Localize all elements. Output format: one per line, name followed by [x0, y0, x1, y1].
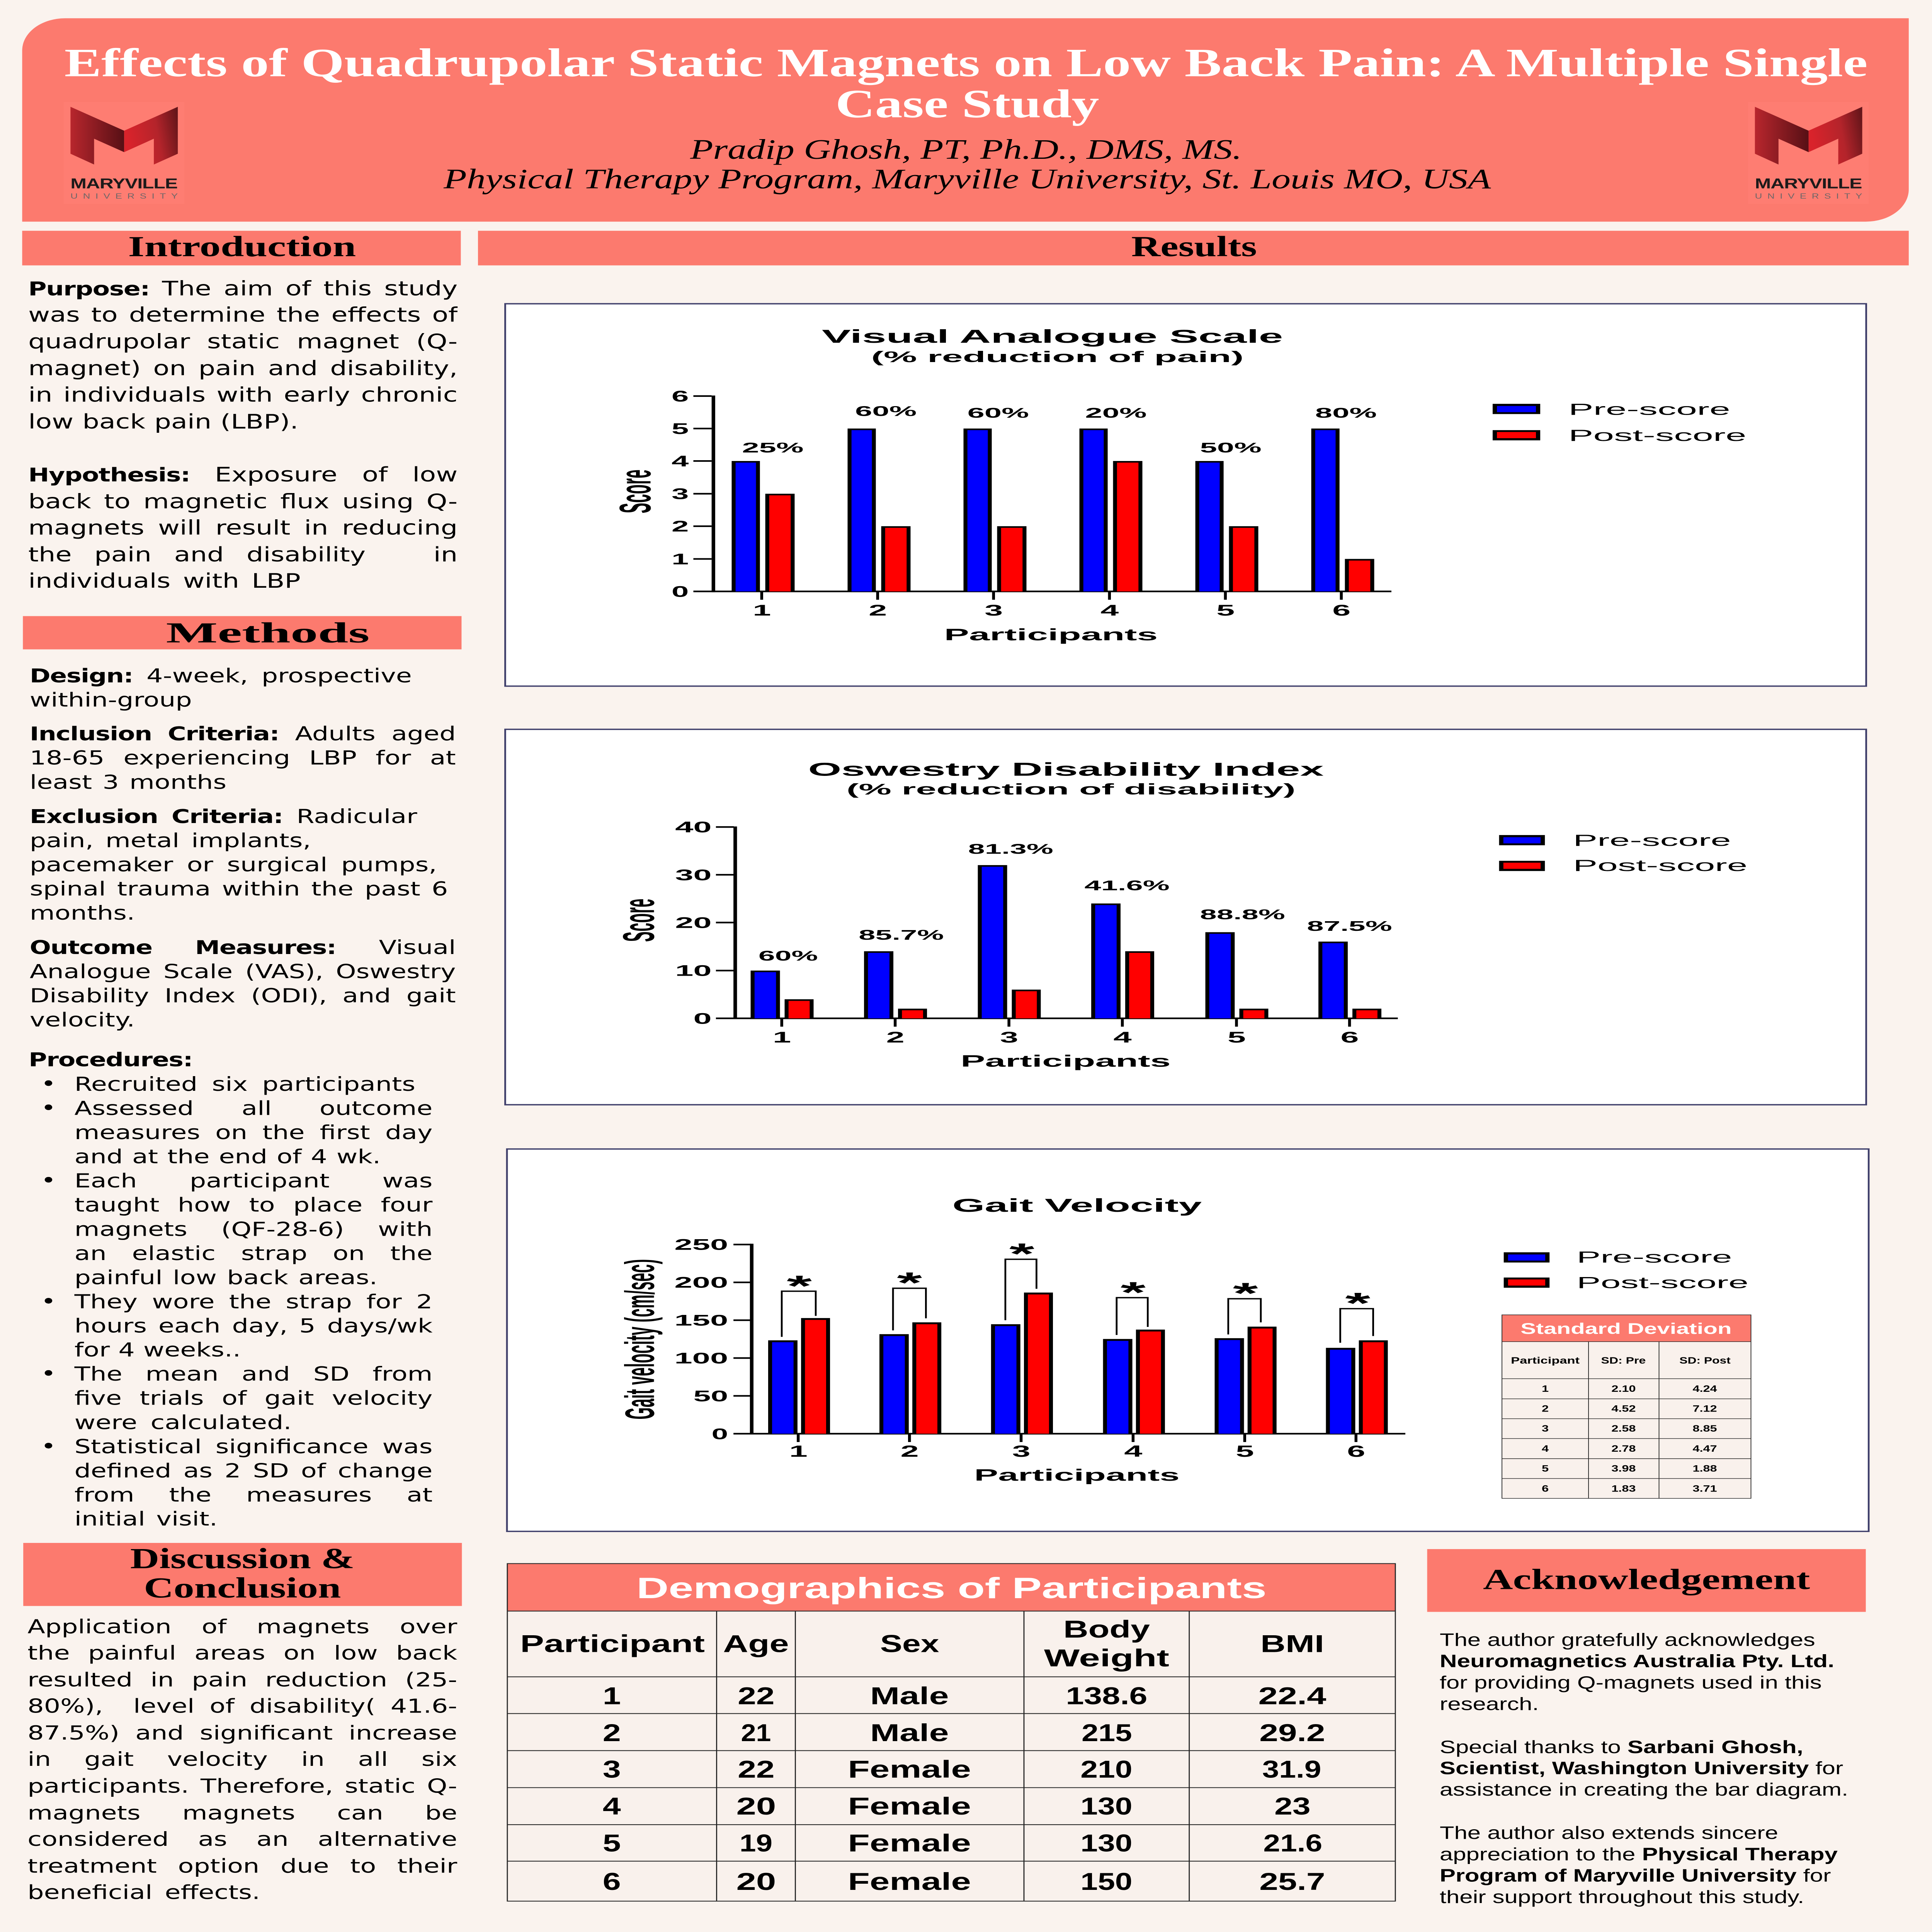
bars: pre-score: [732, 429, 1340, 592]
text: introduction purpose and hypothesis: the pain and disability in: [28, 543, 457, 566]
text: discussion and conclusion: 80%), level of disability( 41.6-: [27, 1695, 457, 1717]
text: methods criteria: spinal trauma within the past 6: [30, 878, 448, 900]
x axis numbers: 6: [1332, 602, 1350, 619]
text: discussion and conclusion: participants. Therefore, static Q-: [27, 1775, 457, 1797]
y axis numbers: 20: [675, 914, 712, 932]
table: Standard Deviation: Participant: [1511, 1355, 1580, 1366]
text: procedures list: The mean and SD from: [75, 1362, 432, 1385]
percent reduction labels: 20%: [1085, 405, 1147, 421]
text: procedures list: initial visit.: [75, 1507, 218, 1530]
text: discussion and conclusion: [27, 1610, 457, 1908]
text: acknowledgement: for providing Q-magnets used in this: [1440, 1673, 1822, 1692]
demographics rows: 25.7: [1259, 1868, 1325, 1895]
text: introduction purpose and hypothesis: magnets will result in reducing: [28, 516, 457, 539]
y axis numbers: 6: [672, 388, 689, 405]
percent reduction labels: 25%: [742, 440, 804, 456]
demographics rows: 22: [738, 1756, 775, 1783]
text: procedures list: painful low back areas.: [75, 1266, 378, 1289]
panel: Gait Velocity chart: [507, 1149, 1869, 1531]
legend: [1504, 1248, 1748, 1292]
panel: Visual Analogue Scale chart: [505, 304, 1866, 686]
bars: post-score: [765, 461, 1374, 592]
authors and affiliation: [443, 134, 1491, 195]
table: Standard Deviation: 3: [1542, 1423, 1549, 1434]
x axis numbers: [789, 1443, 1365, 1460]
demographics rows: Male: [870, 1719, 949, 1747]
panel: Oswestry Disability Index chart: [505, 730, 1866, 1105]
table: Standard Deviation: 7.12: [1693, 1403, 1717, 1414]
x axis numbers: 2: [869, 602, 887, 619]
table: Standard Deviation: 1.83: [1611, 1483, 1636, 1494]
legend: Pre-score: [1568, 401, 1730, 418]
percent reduction labels: [759, 841, 1392, 964]
legend: Post-score: [1573, 857, 1747, 875]
text: introduction purpose and hypothesis: in individuals with early chronic: [28, 383, 457, 406]
x axis numbers: [753, 602, 1350, 619]
x axis numbers: 3: [1000, 1029, 1018, 1046]
text: methods criteria: Disability Index (ODI), and gait: [30, 984, 456, 1007]
demographics rows: 20: [736, 1793, 776, 1820]
text: procedures list: hours each day, 5 days/wk: [75, 1315, 432, 1337]
text: acknowledgement: Program of Maryville University for: [1440, 1866, 1831, 1886]
percent reduction labels: 85.7%: [859, 927, 944, 943]
text: methods criteria: 18-65 experiencing LBP for at: [30, 747, 456, 769]
logo: Maryville University left: [64, 102, 184, 204]
table: Standard Deviation: 2: [1542, 1403, 1549, 1414]
heading: Discussion and Conclusion: Discussion &: [130, 1543, 355, 1575]
logo: Maryville University right: [1748, 102, 1869, 204]
demographics rows: 21.6: [1263, 1830, 1322, 1857]
text: discussion and conclusion: resulted in pain reduction (25-: [27, 1668, 457, 1691]
x axis numbers: 5: [1216, 602, 1235, 619]
significance asterisks: *: [897, 1267, 922, 1299]
text: introduction purpose and hypothesis: Purpose: The aim of this study: [28, 277, 457, 300]
chart title: Gait Velocity: [952, 1195, 1202, 1216]
heading: Discussion and Conclusion: [23, 1543, 462, 1606]
x axis numbers: 4: [1113, 1029, 1132, 1046]
table: Standard Deviation: 2.78: [1611, 1444, 1636, 1454]
chart axes: [693, 395, 1391, 600]
authors and affiliation: Physical Therapy Program, Maryville University, St. Louis MO, USA: [443, 163, 1491, 195]
x axis numbers: 2: [901, 1443, 919, 1460]
x axis label: Participants: [961, 1051, 1171, 1070]
x axis label: Participants: [944, 625, 1158, 644]
text: procedures list: defined as 2 SD of change: [75, 1459, 432, 1482]
legend: Pre-score: [1577, 1248, 1732, 1266]
table: Standard Deviation: SD: Pre: [1601, 1355, 1646, 1366]
text: discussion and conclusion: treatment option due to their: [27, 1855, 457, 1877]
percent reduction labels: 81.3%: [968, 841, 1053, 857]
text: acknowledgement: their support throughout this study.: [1440, 1887, 1804, 1907]
table: Demographics of Participants: [507, 1564, 1395, 1901]
bars: pre-score: [768, 1324, 1355, 1434]
bars: post-score: [785, 951, 1381, 1018]
demographics rows: 4: [603, 1793, 621, 1820]
text: procedures list: were calculated.: [75, 1411, 292, 1434]
demographics column headers: Body: [1063, 1616, 1150, 1643]
x axis numbers: 4: [1124, 1443, 1143, 1460]
demographics rows: 23: [1274, 1793, 1311, 1820]
percent reduction labels: [742, 403, 1377, 456]
demographics rows: 19: [740, 1830, 772, 1857]
significance asterisks: *: [787, 1270, 812, 1303]
text: procedures list: an elastic strap on the: [75, 1242, 432, 1265]
demographics rows: 2: [603, 1719, 621, 1747]
y axis label: Gait velocity (cm/sec): [617, 1259, 663, 1420]
demographics rows: 215: [1082, 1719, 1132, 1747]
percent reduction labels: 50%: [1200, 440, 1262, 456]
chart title: (% reduction of pain): [871, 348, 1244, 366]
x axis numbers: 1: [789, 1443, 808, 1460]
text: procedures list: magnets (QF-28-6) with: [75, 1218, 432, 1240]
demographics rows: 3: [603, 1756, 621, 1783]
text: discussion and conclusion: the painful areas on low back: [27, 1642, 457, 1664]
text: procedures list: taught how to place four: [75, 1194, 432, 1216]
chart axes: [733, 1244, 1405, 1442]
demographics rows: 138.6: [1066, 1682, 1147, 1709]
text: methods criteria: pacemaker or surgical pumps,: [30, 853, 437, 876]
title: Effects of Quadrupolar Static Magnets on Low Back Pain: A Multiple Single: [65, 41, 1867, 85]
y axis numbers: 40: [675, 819, 712, 836]
significance asterisks: *: [1345, 1287, 1370, 1320]
title: Case Study: [835, 82, 1099, 126]
significance asterisks: [787, 1238, 1370, 1320]
x axis label: Participants: [974, 1466, 1180, 1484]
table: Standard Deviation: 3.98: [1611, 1463, 1636, 1474]
significance asterisks: *: [1009, 1238, 1034, 1270]
chart axes: [716, 826, 1398, 1027]
demographics rows: 29.2: [1259, 1719, 1325, 1747]
text: acknowledgement: research.: [1440, 1694, 1539, 1714]
text: acknowledgement: Special thanks to Sarbani Ghosh,: [1440, 1737, 1803, 1757]
bars: post-score: [801, 1293, 1388, 1434]
legend: [1493, 401, 1746, 444]
y axis numbers: 1: [672, 551, 689, 568]
x axis numbers: 1: [773, 1029, 791, 1046]
demographics rows: 6: [603, 1868, 621, 1895]
bars: pre-score: [751, 865, 1348, 1018]
demographics rows: [603, 1682, 1327, 1895]
heading: Discussion and Conclusion: Conclusion: [144, 1572, 341, 1604]
y axis numbers: [675, 819, 712, 1027]
table: Standard Deviation: 1.88: [1693, 1463, 1717, 1474]
text: introduction purpose and hypothesis: back to magnetic flux using Q-: [28, 490, 457, 513]
text: methods criteria: pain, metal implants,: [30, 829, 311, 852]
text: methods criteria: Analogue Scale (VAS), Oswestry: [30, 960, 456, 983]
demographics column headers: Sex: [880, 1630, 939, 1657]
text: procedures list: Statistical significance was: [75, 1435, 432, 1458]
chart title: [808, 759, 1324, 798]
text: methods criteria: Outcome Measures: Visual: [30, 936, 456, 959]
table: Standard Deviation: 8.85: [1693, 1423, 1717, 1434]
demographics rows: Female: [848, 1756, 971, 1783]
demographics column headers: Participant: [520, 1630, 705, 1657]
demographics rows: Male: [870, 1682, 949, 1709]
heading: Acknowledgement: [1427, 1549, 1866, 1612]
y axis numbers: 200: [674, 1274, 728, 1291]
y axis numbers: 10: [675, 962, 712, 980]
y axis numbers: 100: [674, 1350, 728, 1367]
logo: Maryville University right: UNIVERSITY: [1755, 192, 1862, 200]
text: discussion and conclusion: beneficial effects.: [27, 1881, 260, 1903]
text: discussion and conclusion: 87.5%) and significant increase: [27, 1722, 457, 1744]
text: methods criteria: Design: 4-week, prospective: [30, 664, 412, 687]
text: procedures list: Each participant was: [75, 1169, 432, 1192]
text: methods criteria: [30, 660, 456, 1036]
chart title: Oswestry Disability Index: [808, 759, 1324, 780]
text: introduction purpose and hypothesis: magnet) on pain and disability,: [28, 357, 457, 380]
percent reduction labels: 60%: [968, 405, 1029, 421]
text: acknowledgement: assistance in creating the bar diagram.: [1440, 1780, 1848, 1799]
demographics rows: 210: [1080, 1756, 1133, 1783]
demographics rows: 1: [603, 1682, 621, 1709]
table: Standard Deviation: 2.10: [1611, 1384, 1636, 1394]
y axis numbers: 2: [672, 518, 689, 535]
demographics rows: 31.9: [1262, 1756, 1321, 1783]
x axis numbers: 4: [1100, 602, 1119, 619]
y axis numbers: 30: [675, 866, 712, 884]
text: methods criteria: least 3 months: [30, 771, 226, 793]
y axis numbers: 0: [672, 583, 689, 600]
text: procedures list: from the measures at: [75, 1484, 432, 1506]
text: procedures list: Procedures:: [29, 1049, 192, 1071]
x axis numbers: 1: [753, 602, 771, 619]
table: Standard Deviation: [1502, 1315, 1751, 1498]
x axis numbers: 3: [1012, 1443, 1031, 1460]
logo: Maryville University left: UNIVERSITY: [70, 192, 178, 200]
table: Standard Deviation: 2.58: [1611, 1423, 1636, 1434]
y axis numbers: [672, 388, 689, 600]
text: acknowledgement: Neuromagnetics Australia Pty. Ltd.: [1440, 1651, 1834, 1671]
heading: Methods: Methods: [166, 617, 369, 649]
y axis numbers: 5: [672, 420, 689, 437]
text: acknowledgement: The author also extends sincere: [1440, 1823, 1778, 1843]
text: discussion and conclusion: magnets magnets can be: [27, 1801, 457, 1824]
y axis numbers: 50: [693, 1388, 728, 1405]
text: methods criteria: velocity.: [30, 1009, 135, 1031]
authors and affiliation: Pradip Ghosh, PT, Ph.D., DMS, MS.: [690, 134, 1242, 165]
panel: Oswestry Disability Index chart: Score: [614, 899, 663, 942]
text: procedures list: They wore the strap for 2: [75, 1291, 432, 1313]
demographics rows: 20: [736, 1868, 776, 1895]
text: methods criteria: within-group: [30, 689, 192, 711]
table: Standard Deviation: 4.52: [1611, 1403, 1636, 1414]
heading: Acknowledgement: Acknowledgement: [1483, 1563, 1810, 1595]
x axis numbers: [773, 1029, 1359, 1046]
table: Standard Deviation: 1: [1542, 1384, 1549, 1394]
table: Standard Deviation: SD: Post: [1679, 1355, 1731, 1366]
demographics rows: 130: [1080, 1830, 1133, 1857]
y axis numbers: 4: [672, 452, 689, 470]
legend: Post-score: [1568, 427, 1746, 444]
table: Standard Deviation: 4.24: [1693, 1384, 1717, 1394]
y axis numbers: 150: [674, 1312, 728, 1329]
y axis numbers: [674, 1236, 728, 1443]
percent reduction labels: 60%: [855, 403, 917, 419]
header banner: [22, 18, 1909, 222]
demographics rows: 130: [1080, 1793, 1133, 1820]
panel: Visual Analogue Scale chart: Score: [610, 469, 660, 513]
x axis numbers: 3: [985, 602, 1003, 619]
chart title: [822, 326, 1283, 366]
legend: [1499, 832, 1747, 875]
text: procedures list: [29, 1044, 433, 1535]
demographics column headers: Weight: [1044, 1645, 1169, 1672]
table: Standard Deviation: 4.47: [1693, 1444, 1717, 1454]
percent reduction labels: 41.6%: [1084, 878, 1170, 894]
percent reduction labels: 60%: [759, 948, 818, 964]
x axis numbers: 5: [1236, 1443, 1254, 1460]
heading: Introduction: Introduction: [128, 231, 356, 263]
text: acknowledgement: appreciation to the Physical Therapy: [1440, 1844, 1838, 1864]
x axis numbers: 2: [886, 1029, 905, 1046]
percent reduction labels: 87.5%: [1307, 918, 1392, 934]
text: acknowledgement: The author gratefully acknowledges: [1440, 1630, 1815, 1650]
significance asterisks: *: [1233, 1277, 1258, 1310]
demographics rows: 5: [603, 1830, 621, 1857]
text: procedures list: Recruited six participants: [75, 1073, 415, 1095]
text: discussion and conclusion: Application of magnets over: [27, 1616, 457, 1638]
text: procedures list: five trials of gait velocity: [75, 1387, 432, 1409]
demographics rows: Female: [848, 1830, 971, 1857]
y axis numbers: 0: [712, 1425, 728, 1443]
demographics column headers: [520, 1616, 1324, 1672]
table: Demographics of Participants: Demographics of Participants: [636, 1572, 1267, 1605]
demographics rows: 150: [1080, 1868, 1133, 1895]
text: procedures list: and at the end of 4 wk.: [75, 1145, 381, 1168]
text: discussion and conclusion: in gait velocity in all six: [27, 1748, 457, 1770]
text: introduction purpose and hypothesis: quadrupolar static magnet (Q-: [28, 330, 457, 353]
demographics column headers: BMI: [1260, 1630, 1324, 1657]
table: Standard Deviation: Standard Deviation: [1520, 1320, 1731, 1337]
text: methods criteria: Exclusion Criteria: Radicular: [30, 805, 417, 828]
text: acknowledgement: [1440, 1630, 1848, 1907]
table: Standard Deviation: 6: [1542, 1483, 1549, 1494]
demographics rows: Female: [848, 1793, 971, 1820]
percent reduction labels: 88.8%: [1200, 907, 1285, 923]
legend: Pre-score: [1573, 832, 1731, 849]
logo: Maryville University left: MARYVILLE: [70, 175, 178, 192]
heading: Results: [478, 231, 1909, 265]
heading: Methods: [23, 616, 461, 650]
significance brackets: [782, 1259, 1373, 1343]
percent reduction labels: 80%: [1315, 405, 1377, 421]
demographics rows: 21: [741, 1719, 771, 1747]
chart title: Visual Analogue Scale: [822, 326, 1283, 347]
text: methods criteria: months.: [30, 901, 135, 924]
text: procedures list: measures on the first day: [75, 1121, 432, 1144]
heading: Results: Results: [1131, 231, 1257, 263]
demographics column headers: Age: [723, 1630, 789, 1657]
title: [65, 41, 1867, 126]
y axis numbers: 250: [674, 1236, 728, 1253]
text: acknowledgement: Scientist, Washington University for: [1440, 1758, 1843, 1778]
text: introduction purpose and hypothesis: [28, 274, 457, 596]
text: procedures list: for 4 weeks..: [75, 1338, 241, 1361]
table: Standard Deviation: 3.71: [1693, 1483, 1717, 1494]
text: introduction purpose and hypothesis: Hypothesis: Exposure of low: [28, 463, 457, 486]
text: discussion and conclusion: considered as an alternative: [27, 1828, 457, 1850]
demographics rows: 22.4: [1258, 1682, 1327, 1709]
heading: Introduction: [22, 231, 461, 265]
x axis numbers: 6: [1347, 1443, 1365, 1460]
text: methods criteria: Inclusion Criteria: Adults aged: [30, 722, 456, 745]
logo: Maryville University right: MARYVILLE: [1755, 175, 1862, 192]
y axis numbers: 0: [693, 1010, 712, 1027]
text: introduction purpose and hypothesis: individuals with LBP: [28, 570, 301, 592]
demographics rows: Female: [848, 1868, 971, 1895]
text: introduction purpose and hypothesis: low back pain (LBP).: [28, 410, 298, 434]
demographics rows: 22: [738, 1682, 775, 1709]
table: Standard Deviation: 4: [1542, 1444, 1549, 1454]
significance asterisks: *: [1121, 1276, 1146, 1309]
table: Standard Deviation: 5: [1542, 1463, 1549, 1474]
chart title: (% reduction of disability): [847, 781, 1296, 798]
text: introduction purpose and hypothesis: was to determine the effects of: [28, 303, 457, 327]
x axis numbers: 6: [1340, 1029, 1359, 1046]
legend: Post-score: [1577, 1274, 1748, 1292]
y axis numbers: 3: [672, 485, 689, 503]
text: procedures list: Assessed all outcome: [75, 1097, 432, 1119]
x axis numbers: 5: [1228, 1029, 1246, 1046]
